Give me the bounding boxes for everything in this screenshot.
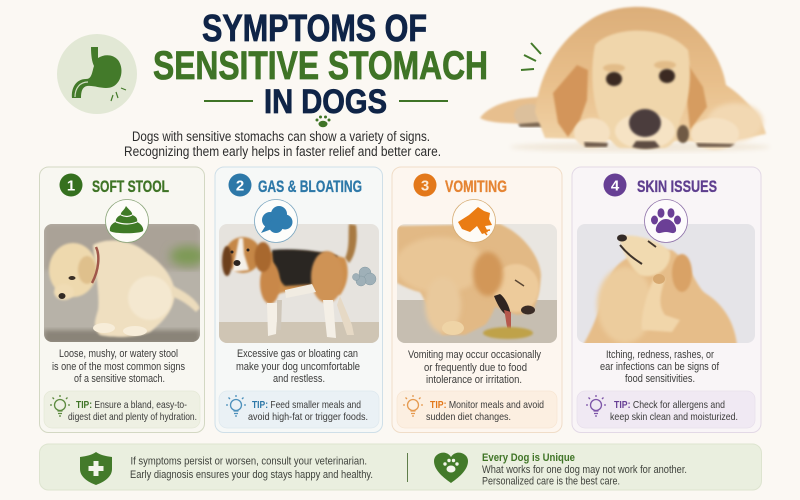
icon: bulb <box>586 395 606 416</box>
text: consult your veterinarian: Early diagnosis ensures your dog stays happy and healthy. <box>130 469 373 481</box>
intro text: Recognizing them early helps in faster relief and better care. <box>124 144 441 159</box>
intro text: Dogs with sensitive stomachs can show a variety of signs. <box>132 129 430 144</box>
icon: bulb <box>403 395 423 416</box>
heading: gas and bloating: GAS & BLOATING <box>258 178 362 196</box>
heading: soft stool: SOFT STOOL <box>92 178 169 196</box>
icon: cloud badge <box>254 200 298 242</box>
text: consult your veterinarian <box>130 456 373 481</box>
text: every dog is unique: Every Dog is Unique <box>482 452 575 464</box>
photo: beagle <box>219 224 379 344</box>
number badge 3: 3 <box>421 178 429 194</box>
description: gas and bloating <box>236 348 360 385</box>
description: vomiting: or frequently due to food <box>424 362 527 374</box>
photo: scratching dog <box>577 224 755 345</box>
description: soft stool: Loose, mushy, or watery stool <box>59 348 178 360</box>
tip: gas and bloating <box>219 391 379 428</box>
description: soft stool: of a sensitive stomach. <box>74 373 165 385</box>
footer banner <box>40 444 762 490</box>
number badge 3 <box>414 174 436 196</box>
tip: soft stool: TIP: Ensure a bland, easy-to- <box>76 400 187 411</box>
tip: soft stool: digest diet and plenty of hydration. <box>68 412 197 423</box>
title <box>153 8 488 121</box>
panel: gas and bloating <box>215 167 382 432</box>
icon: gas puff <box>352 267 376 286</box>
description: gas and bloating: and restless. <box>273 373 325 385</box>
panel: skin issues <box>572 167 761 432</box>
description: gas and bloating: Excessive gas or bloating can <box>237 348 358 360</box>
icon: shield with cross <box>80 452 112 485</box>
number badge 2: 2 <box>236 178 244 194</box>
description: vomiting <box>408 349 542 386</box>
heading: skin issues: SKIN ISSUES <box>637 178 717 196</box>
tip: skin issues <box>577 391 755 428</box>
photo: puppy <box>44 224 206 344</box>
tip: vomiting: sudden diet changes. <box>426 412 511 423</box>
text: every dog is unique <box>482 452 687 488</box>
icon: green alert marks <box>521 43 541 70</box>
description: gas and bloating: make your dog uncomfortable <box>236 361 360 373</box>
text: consult your veterinarian: If symptoms persist or worsen, consult your veterinarian. <box>130 456 367 468</box>
photo: vomiting dog <box>395 224 557 344</box>
description: skin issues <box>600 349 719 385</box>
panel: soft stool <box>40 167 206 432</box>
number badge 4 <box>604 174 626 196</box>
text: every dog is unique: Personalized care is the best care. <box>482 476 620 488</box>
icon: title paw <box>316 116 330 127</box>
illustration: sad golden retriever lying down <box>480 7 770 152</box>
icon: vomit badge <box>452 200 496 242</box>
number badge 4: 4 <box>611 178 620 194</box>
description: skin issues: Itching, redness, rashes, or <box>606 349 714 361</box>
icon: bulb <box>226 395 246 416</box>
tip: skin issues: keep skin clean and moisturized. <box>610 412 738 423</box>
icon: stomach badge <box>57 34 137 114</box>
description: skin issues: food sensitivities. <box>625 373 695 385</box>
icon: heart with paw <box>434 453 468 483</box>
description: soft stool: is one of the most common signs <box>52 361 185 373</box>
tip: soft stool <box>44 391 200 428</box>
number badge 1 <box>60 174 82 196</box>
heading: vomiting: VOMITING <box>445 178 507 196</box>
title: IN DOGS <box>264 83 387 121</box>
tip: vomiting: TIP: Monitor meals and avoid <box>430 400 544 411</box>
title: SENSITIVE STOMACH <box>153 44 488 88</box>
icon: bulb <box>50 395 70 416</box>
tip: vomiting <box>397 391 557 428</box>
panel: vomiting <box>392 167 562 432</box>
icon: poop badge <box>106 200 148 242</box>
number badge 1: 1 <box>67 178 75 194</box>
icon: paw badge <box>644 200 688 242</box>
description: soft stool <box>52 348 185 385</box>
description: vomiting: Vomiting may occur occasionally <box>408 349 542 361</box>
description: skin issues: ear infections can be signs of <box>600 361 719 373</box>
intro text <box>124 129 441 159</box>
tip: skin issues: TIP: Check for allergens and <box>614 400 725 411</box>
tip: gas and bloating: TIP: Feed smaller meals and <box>252 400 361 411</box>
text: every dog is unique: What works for one dog may not work for another. <box>482 464 687 476</box>
title: SYMPTOMS OF <box>202 8 427 50</box>
tip: gas and bloating: avoid high-fat or trigger foods. <box>248 412 368 423</box>
description: vomiting: intolerance or irritation. <box>426 374 522 386</box>
number badge 2 <box>228 174 252 196</box>
